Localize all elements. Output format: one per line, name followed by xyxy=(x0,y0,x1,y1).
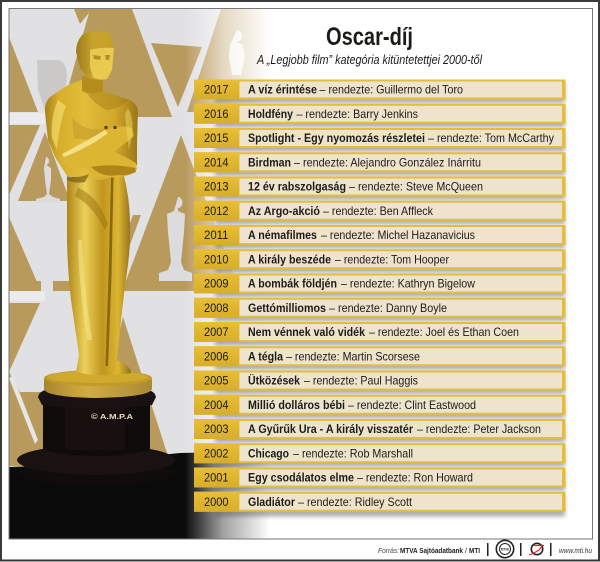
statuette xyxy=(17,31,175,485)
pedestal: black base xyxy=(17,390,175,475)
row 2001: – rendezte: Ron Howard xyxy=(357,470,473,484)
row 2003: – rendezte: Peter Jackson xyxy=(417,422,541,436)
row 2003 xyxy=(194,419,566,439)
row 2012 xyxy=(194,201,566,221)
row 2000: 2000 xyxy=(204,495,229,509)
row 2010: A király beszéde xyxy=(248,252,331,266)
row 2001: 2001 xyxy=(204,470,229,484)
icon: MTVA round logo: MTVA xyxy=(501,548,509,552)
row 2001: Egy csodálatos elme xyxy=(248,470,354,484)
backdrop with gold triangles xyxy=(10,9,264,467)
row 2008 xyxy=(194,298,566,318)
source line: MTI xyxy=(469,546,480,555)
row 2006: 2006 xyxy=(204,349,229,363)
background silhouettes xyxy=(36,30,245,281)
row 2013: 12 év rabszolgaság xyxy=(248,180,346,194)
row 2012: – rendezte: Ben Affleck xyxy=(323,204,434,218)
source line: / xyxy=(465,546,468,555)
row shadows xyxy=(215,83,565,516)
floor xyxy=(10,452,266,538)
row 2014: 2014 xyxy=(204,155,229,169)
row 2011 xyxy=(194,225,566,245)
row 2000: – rendezte: Ridley Scott xyxy=(298,495,413,509)
row 2003: A Gyűrűk Ura - A király visszatér xyxy=(248,422,413,436)
row 2006: – rendezte: Martin Scorsese xyxy=(286,349,420,363)
footer credits xyxy=(378,540,592,558)
row 2005 xyxy=(194,370,566,390)
row 2007: 2007 xyxy=(204,325,229,339)
row 2010: – rendezte: Tom Hooper xyxy=(335,252,449,266)
row 2010: 2010 xyxy=(204,252,229,266)
title: Oscar-díj xyxy=(326,23,413,51)
row 2015: Spotlight - Egy nyomozás részletei xyxy=(248,131,425,145)
separators xyxy=(487,543,552,556)
row 2005: Ütközések xyxy=(248,372,300,388)
row 2013: – rendezte: Steve McQueen xyxy=(349,180,483,194)
row 2004: – rendezte: Clint Eastwood xyxy=(348,398,476,412)
row 2000: Gladiátor xyxy=(248,495,295,509)
row 2017 xyxy=(194,80,566,100)
subtitle: A „Legjobb film” kategória kitüntetettjei 2000-től xyxy=(256,53,483,67)
row 2000 xyxy=(194,492,566,512)
row 2006 xyxy=(194,346,566,366)
row 2014 xyxy=(194,152,566,172)
row 2009: 2009 xyxy=(204,276,229,290)
photo: Oscar statuette against a triangle backdrop xyxy=(10,9,266,538)
row 2007: Nem vénnek való vidék xyxy=(248,325,365,339)
row 2008: Gettómilliomos xyxy=(248,301,326,315)
source line: MTVA Sajtóadatbank xyxy=(400,546,464,555)
row 2005: – rendezte: Paul Haggis xyxy=(304,374,418,388)
row 2015 xyxy=(194,128,566,148)
source line: Forrás: xyxy=(378,546,399,555)
head xyxy=(76,31,114,80)
row 2004 xyxy=(194,395,566,415)
row 2010 xyxy=(194,249,566,269)
row 2014: Birdman xyxy=(248,155,291,169)
row 2014: – rendezte: Alejandro González Inárritu xyxy=(294,155,481,169)
row 2015: 2015 xyxy=(204,131,229,145)
row 2013: 2013 xyxy=(204,180,229,194)
icon: MTI logo xyxy=(529,543,544,555)
row 2009: A bombák földjén xyxy=(248,276,337,290)
row 2009 xyxy=(194,274,566,294)
row 2012: Az Argo-akció xyxy=(248,204,320,218)
row 2002: 2002 xyxy=(204,446,229,460)
website: www.mti.hu xyxy=(559,548,592,555)
white fade of the photo toward the list xyxy=(185,9,270,539)
row 2017: A víz érintése xyxy=(248,82,317,96)
row 2007 xyxy=(194,322,566,342)
row 2017: – rendezte: Guillermo del Toro xyxy=(320,82,463,96)
row 2002 xyxy=(194,443,566,463)
row 2011: 2011 xyxy=(204,228,229,242)
row 2011: A némafilmes xyxy=(248,228,317,242)
row 2016 xyxy=(194,104,566,124)
row 2002: – rendezte: Rob Marshall xyxy=(293,446,413,460)
row 2001 xyxy=(194,468,566,488)
row 2004: Millió dolláros bébi xyxy=(248,398,345,412)
pedestal engraving: © A.M.P.A xyxy=(91,412,134,421)
row 2006: A tégla xyxy=(248,349,283,363)
row 2013 xyxy=(194,176,566,196)
row 2009: – rendezte: Kathryn Bigelow xyxy=(341,276,475,290)
row 2016: Holdfény xyxy=(248,107,293,121)
row 2016: 2016 xyxy=(204,107,229,121)
row 2017: 2017 xyxy=(204,82,229,96)
row 2003: 2003 xyxy=(204,422,229,436)
row 2004: 2004 xyxy=(204,398,229,412)
row 2008: – rendezte: Danny Boyle xyxy=(329,301,447,315)
row 2016: – rendezte: Barry Jenkins xyxy=(296,107,418,121)
row 2002: Chicago xyxy=(248,446,289,460)
torso and arms xyxy=(45,80,138,180)
gold disk xyxy=(44,370,152,398)
row 2005: 2005 xyxy=(204,374,229,388)
row 2008: 2008 xyxy=(204,301,229,315)
row 2007: – rendezte: Joel és Ethan Coen xyxy=(369,325,519,339)
row 2015: – rendezte: Tom McCarthy xyxy=(428,131,554,145)
row 2012: 2012 xyxy=(204,204,229,218)
row 2011: – rendezte: Michel Hazanavicius xyxy=(321,228,475,242)
body and legs xyxy=(67,170,131,375)
icon: MTVA round logo xyxy=(496,540,514,558)
neck xyxy=(82,76,103,94)
list of Best Picture winners xyxy=(194,80,566,512)
